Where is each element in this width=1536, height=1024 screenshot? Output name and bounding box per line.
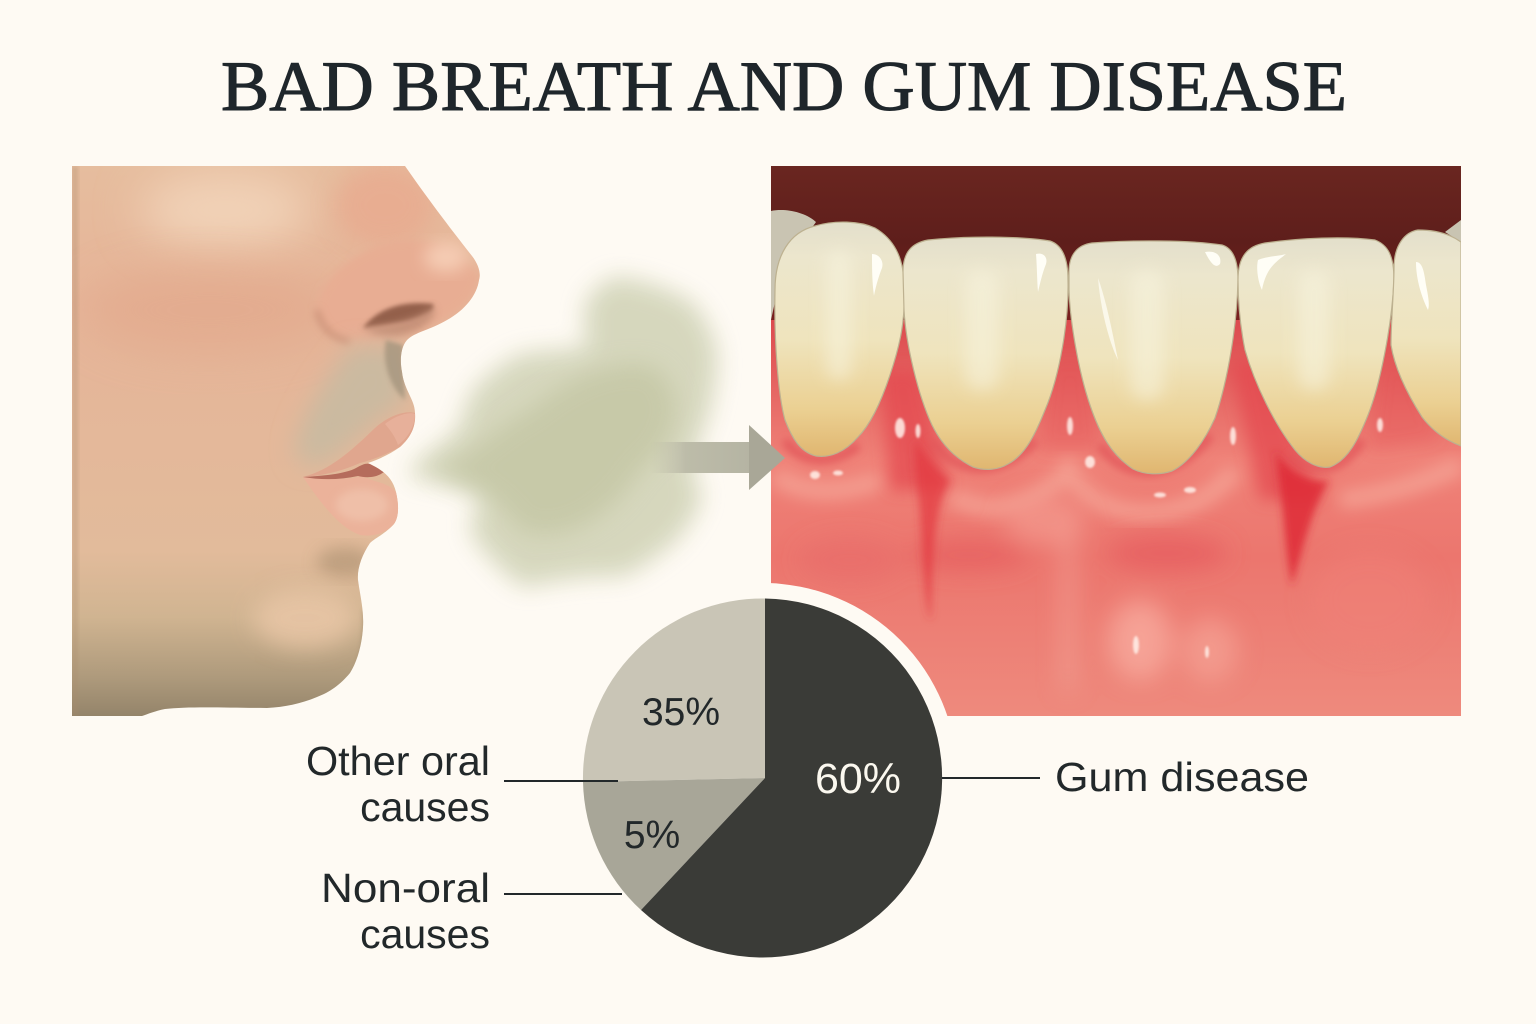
illustration: face profile	[72, 163, 492, 716]
arrow	[650, 425, 785, 490]
legend: non-oral causes: Non-oral	[321, 865, 490, 911]
legend: other oral causes	[306, 738, 618, 830]
stubble shadow	[295, 345, 410, 465]
nostril	[363, 303, 433, 328]
gum wet specks	[810, 417, 1383, 658]
illustration: breath cloud	[410, 277, 717, 587]
tooth 4	[1238, 238, 1394, 467]
dark mouth background	[771, 166, 1461, 320]
slice: other oral causes 35%	[583, 598, 765, 782]
pie label 5%: 5%	[624, 814, 680, 857]
nose wing	[344, 250, 480, 298]
tooth soft sheen	[826, 250, 1330, 400]
lips	[303, 412, 415, 536]
slice: gum disease 60%	[641, 598, 942, 957]
gum margin highlight band	[775, 465, 1461, 513]
tooth 1	[775, 222, 904, 456]
legend: non-oral causes	[321, 865, 622, 957]
gum lower folds	[916, 500, 1240, 684]
under-lip shadow and chin highlight	[317, 547, 373, 577]
legend: non-oral causes: causes	[360, 911, 490, 957]
tooth 5	[1391, 230, 1461, 446]
illustration: gums and teeth	[568, 166, 1461, 973]
slice: non-oral causes 5%	[583, 778, 765, 910]
legend: other oral causes: causes	[360, 784, 490, 830]
legend: other oral causes: Other oral	[306, 738, 490, 784]
cutout ring around pie	[771, 583, 948, 716]
gum margin redness	[785, 435, 1362, 472]
back tooth right	[1445, 220, 1461, 242]
pie label 60%: 60%	[815, 755, 901, 803]
title: BAD BREATH AND GUM DISEASE	[221, 48, 1347, 126]
tooth 2	[903, 237, 1068, 469]
pie label 35%: 35%	[642, 691, 720, 734]
tooth glints	[872, 252, 1429, 360]
back tooth left	[771, 210, 816, 320]
legend: gum disease: Gum disease	[1055, 754, 1309, 800]
gum interdental redness	[880, 360, 1440, 500]
pie chart	[583, 598, 942, 957]
tooth 3	[1069, 241, 1238, 474]
bleeding streaks	[915, 440, 1330, 620]
